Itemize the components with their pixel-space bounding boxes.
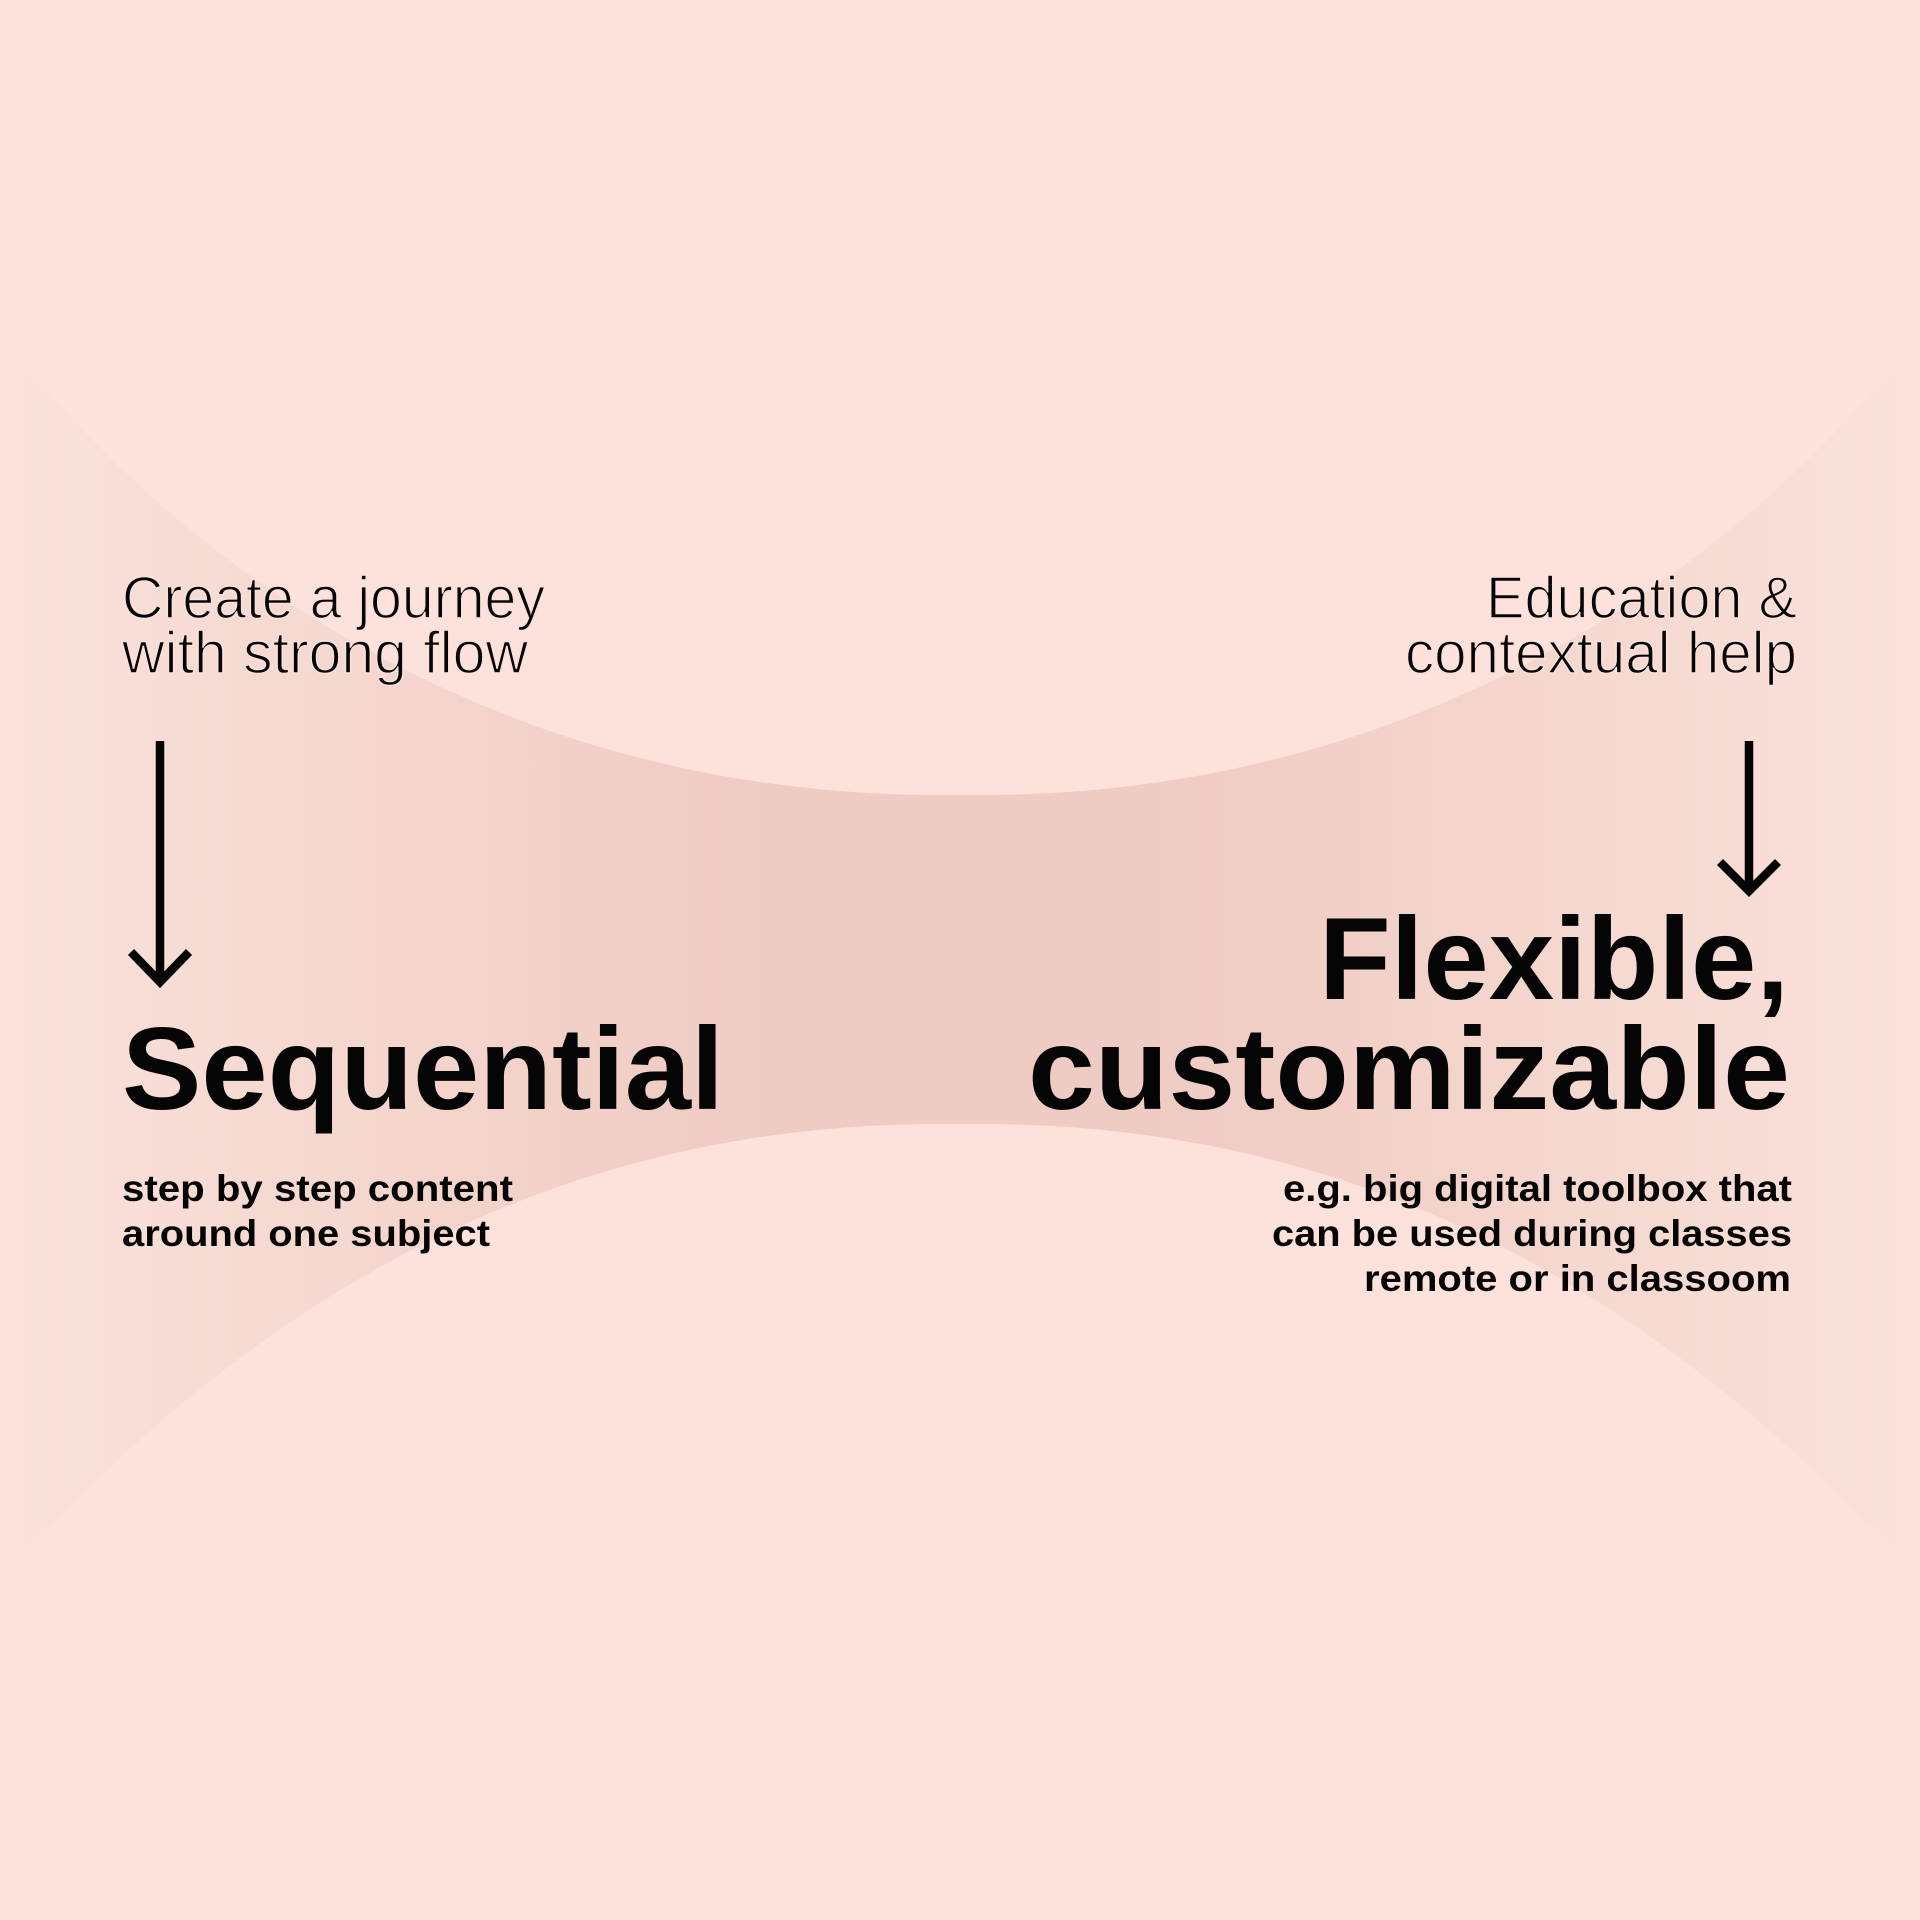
text: journey intro: with strong flow <box>121 620 528 686</box>
arrow: left down arrow <box>131 741 189 982</box>
text: sequential description: step by step content <box>122 1167 514 1209</box>
arrow: right down arrow <box>1720 741 1778 891</box>
text: education intro: contextual help <box>1405 620 1797 686</box>
heading: flexible customizable <box>1028 893 1790 1134</box>
text: education intro: Education & <box>1486 565 1797 631</box>
heading: flexible customizable: Flexible, <box>1319 893 1789 1024</box>
text: sequential description <box>122 1167 514 1254</box>
text: sequential description: around one subject <box>122 1212 491 1254</box>
hourglass band shape <box>0 335 1920 1580</box>
heading: flexible customizable: customizable <box>1028 1003 1790 1134</box>
panel: flexible <box>1028 565 1797 1299</box>
text: education intro <box>1405 565 1797 686</box>
text: flexible description: e.g. big digital toolbox that <box>1283 1167 1793 1209</box>
text: flexible description <box>1272 1167 1793 1299</box>
heading: sequential: Sequential <box>122 1003 724 1134</box>
text: flexible description: remote or in classoom <box>1364 1257 1791 1299</box>
text: journey intro: Create a journey <box>122 565 545 631</box>
panel: sequential <box>121 565 724 1254</box>
text: flexible description: can be used during classes <box>1272 1212 1792 1254</box>
text: journey intro <box>121 565 545 686</box>
